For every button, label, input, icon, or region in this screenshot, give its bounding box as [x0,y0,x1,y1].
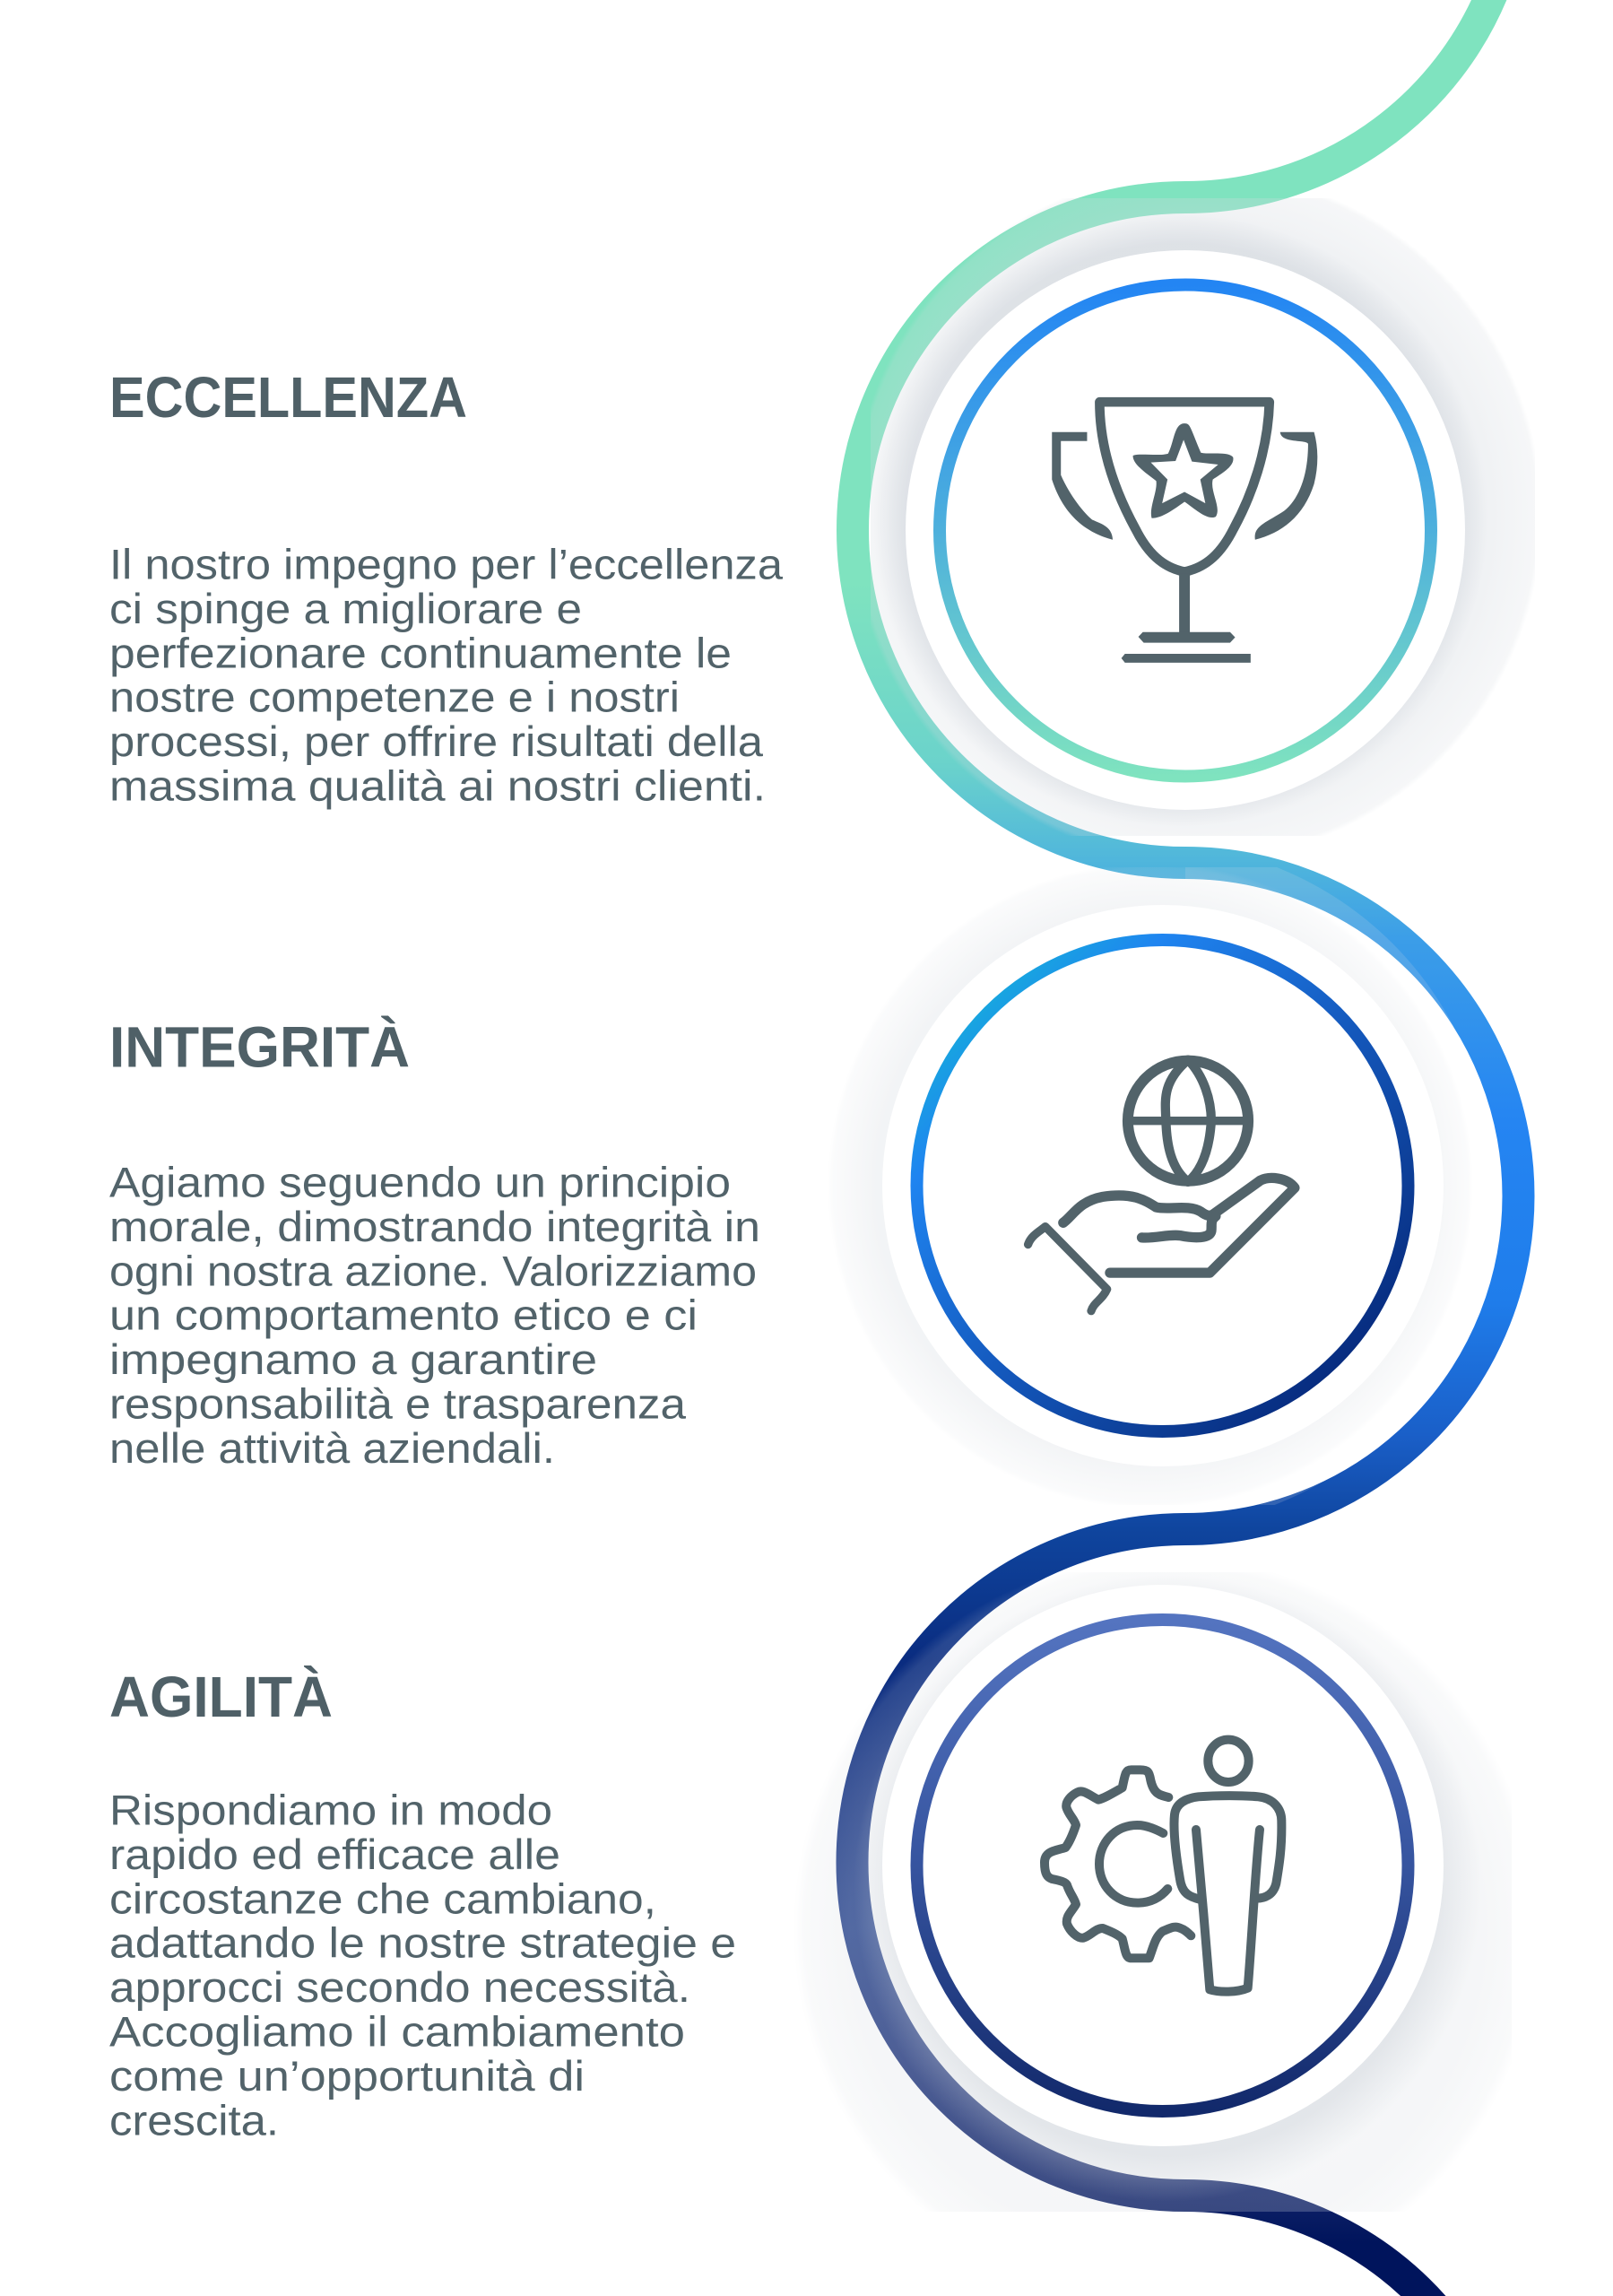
gradient ring [916,1620,1408,2111]
icon: person with gear [1045,1740,1281,1992]
text block: integrità description: responsabilità e trasparenza [109,1379,687,1428]
text block: agilità description: rapido ed efficace alle [109,1831,560,1878]
text block: integrità description: impegnamo a garantire [109,1335,597,1383]
gradient ring [916,940,1408,1431]
white disk [906,250,1465,810]
text block: eccellenza description: ci spinge a migliorare e [109,585,582,632]
white disk [882,905,1444,1466]
panel: integrità circle [853,867,1454,1505]
heading: agilità: AGILITÀ [109,1665,333,1729]
text block: agilità description: circostanze che cambiano, [109,1874,656,1922]
text block: integrità description: ogni nostra azione. Valorizziamo [109,1247,757,1294]
text block: integrità description: un comportamento etico e ci [109,1292,698,1339]
text block: integrità description: nelle attività aziendali. [109,1424,555,1472]
text block: integrità description [109,1159,760,1472]
text block: integrità description: morale, dimostrando integrità in [109,1203,760,1250]
panel: eccellenza text [109,365,784,809]
panel: agilità circle [828,1577,1503,2212]
text block: agilità description: come un’opportunità di [109,2052,585,2100]
panel: eccellenza circle [871,198,1535,836]
text block: eccellenza description: massima qualità ai nostri clienti. [109,762,766,809]
heading: integrità: INTEGRITÀ [109,1015,410,1080]
panel: agilità text [109,1665,736,2144]
flowing gradient ribbon [852,0,1518,2296]
text block: agilità description: crescita. [109,2096,279,2144]
text block: eccellenza description: perfezionare continuamente le [109,629,732,676]
text block: eccellenza description [109,540,784,809]
text block: agilità description: approcci secondo necessità. [109,1963,690,2011]
text block: eccellenza description: nostre competenze e i nostri [109,674,680,721]
text block: agilità description: adattando le nostre strategie e [109,1919,736,1967]
soft shadow halo [828,1577,1503,2212]
heading: eccellenza: ECCELLENZA [109,365,467,430]
text block: agilità description [109,1787,736,2144]
panel: integrità text [109,1015,760,1472]
text block: agilità description: Rispondiamo in modo [109,1787,552,1833]
soft shadow halo [853,867,1454,1505]
icon: trophy with star [1052,402,1317,663]
text block: integrità description: Agiamo seguendo un principio [109,1159,731,1205]
white disk [882,1585,1444,2146]
text block: eccellenza description: Il nostro impegno per l’eccellenza [109,540,784,588]
soft shadow halo [871,198,1535,836]
gradient ring [940,285,1431,777]
text block: agilità description: Accogliamo il cambiamento [109,2007,685,2056]
icon: hand holding globe [1028,1060,1295,1311]
text block: eccellenza description: processi, per offrire risultati della [109,718,764,765]
